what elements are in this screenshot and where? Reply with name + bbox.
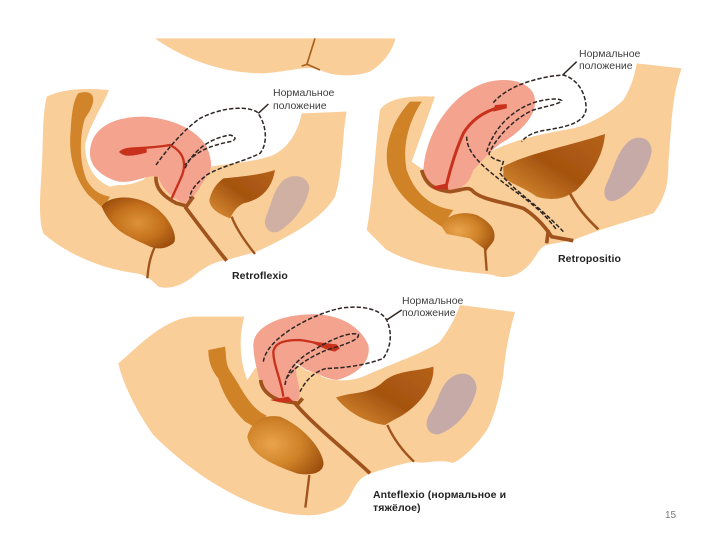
body tissue bbox=[40, 89, 347, 288]
label: Anteflexio caption second line: тяжёлое) bbox=[373, 502, 421, 514]
label: Retroflexio: Retroflexio bbox=[232, 270, 288, 282]
rectum bbox=[387, 102, 453, 227]
body tissue bbox=[367, 63, 682, 277]
panel: retropositio bbox=[367, 62, 682, 277]
vagina bbox=[261, 380, 370, 473]
label: normal position: Нормальное bbox=[579, 48, 641, 60]
vagina / pouch wall bbox=[422, 170, 573, 243]
normal position dashed outline bbox=[156, 108, 265, 198]
panel: anteflexio bbox=[118, 305, 515, 515]
white crescent bbox=[87, 147, 143, 185]
label: normal position: Нормальное bbox=[273, 87, 335, 99]
bladder bbox=[209, 170, 275, 218]
rectum bbox=[70, 92, 110, 208]
pubic bone bbox=[604, 138, 652, 201]
rectum bbox=[208, 347, 267, 428]
uterine cavity bbox=[273, 340, 338, 397]
uterine cavity bbox=[446, 106, 507, 187]
bladder bbox=[336, 367, 433, 425]
panel: retroflexio bbox=[40, 89, 347, 288]
label: normal position second line: положение bbox=[402, 307, 456, 319]
normal position dashed outline bbox=[493, 75, 586, 142]
label: normal position: Нормальное bbox=[402, 295, 464, 307]
top body fragment bbox=[155, 38, 395, 75]
uterus bbox=[253, 314, 369, 402]
normal position dashed outline bbox=[263, 307, 390, 392]
bladder bbox=[503, 134, 605, 199]
pubic bone bbox=[427, 374, 477, 434]
white gap bbox=[297, 363, 318, 372]
label: Anteflexio caption: Anteflexio (нормальное и bbox=[373, 489, 506, 501]
label: Retropositio: Retropositio bbox=[558, 253, 621, 265]
uterus bbox=[423, 80, 535, 191]
pubic bone bbox=[265, 176, 309, 232]
uterus bbox=[90, 117, 211, 203]
vagina bbox=[156, 177, 227, 261]
body tissue bbox=[118, 305, 515, 515]
label: normal position second line: положение bbox=[273, 100, 327, 112]
label: normal position second line: положение bbox=[579, 60, 633, 72]
slide number: 15 bbox=[665, 510, 677, 521]
uterine cavity bbox=[120, 145, 184, 198]
